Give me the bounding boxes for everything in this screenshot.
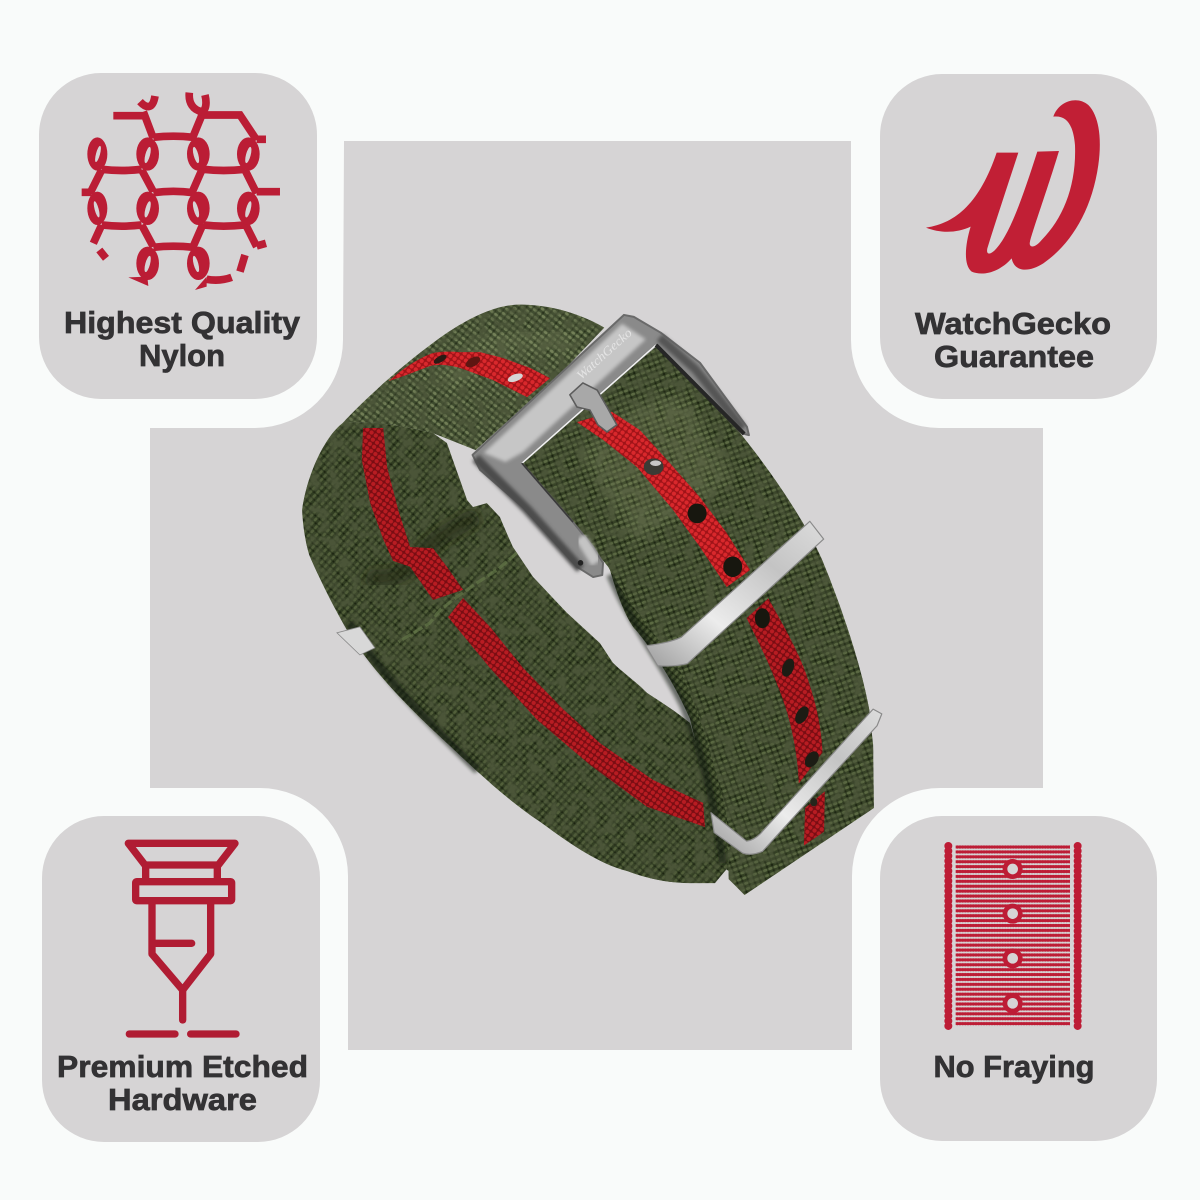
strap holes (644, 458, 822, 806)
red stripe: lower band (448, 598, 705, 827)
strap: under layer at front band (608, 563, 735, 875)
label: WatchGecko guarantee: Guarantee (934, 339, 1094, 374)
strap shading (349, 337, 723, 863)
red stripe: left loop (362, 428, 463, 600)
strap mottling (302, 304, 728, 883)
panel: highest quality nylon (39, 73, 317, 399)
front band mottling (526, 348, 874, 895)
icon: W logo (926, 100, 1100, 274)
label: WatchGecko guarantee: WatchGecko (915, 306, 1111, 341)
red stripe: front band middle (747, 598, 822, 783)
buckle (473, 315, 749, 577)
top band holes (432, 353, 524, 384)
background cross panel (150, 141, 1043, 1050)
rear keeper end (337, 627, 375, 655)
upper keeper (646, 521, 824, 666)
strap stitching (399, 553, 517, 642)
buckle engraving: WatchGecko (574, 326, 635, 382)
panel: no fraying (880, 816, 1157, 1141)
red stripe: front band (577, 412, 750, 587)
buckle tongue (570, 383, 617, 432)
product photo: nylon watch strap (302, 304, 882, 895)
label: premium etched hardware: Premium Etched (57, 1049, 308, 1084)
label: no fraying: No Fraying (934, 1049, 1094, 1084)
lower keeper (711, 709, 882, 854)
label: highest quality nylon: Highest Quality (64, 305, 301, 340)
front band highlight (581, 396, 735, 543)
icon: frayless webbing (948, 845, 1078, 1027)
red stripe: front band end (804, 791, 825, 846)
strap: front band (521, 345, 874, 895)
icon: laser etching nozzle (128, 843, 236, 1034)
icon: nylon mesh (82, 93, 280, 290)
label: premium etched hardware: Hardware (108, 1082, 257, 1117)
strap: upper band (343, 305, 604, 450)
panel: premium etched hardware (42, 816, 320, 1142)
panel: WatchGecko guarantee (880, 74, 1157, 399)
strap: left loop and lower band (302, 422, 735, 883)
red stripe: upper band (389, 352, 550, 397)
label: highest quality nylon: Nylon (139, 338, 225, 373)
